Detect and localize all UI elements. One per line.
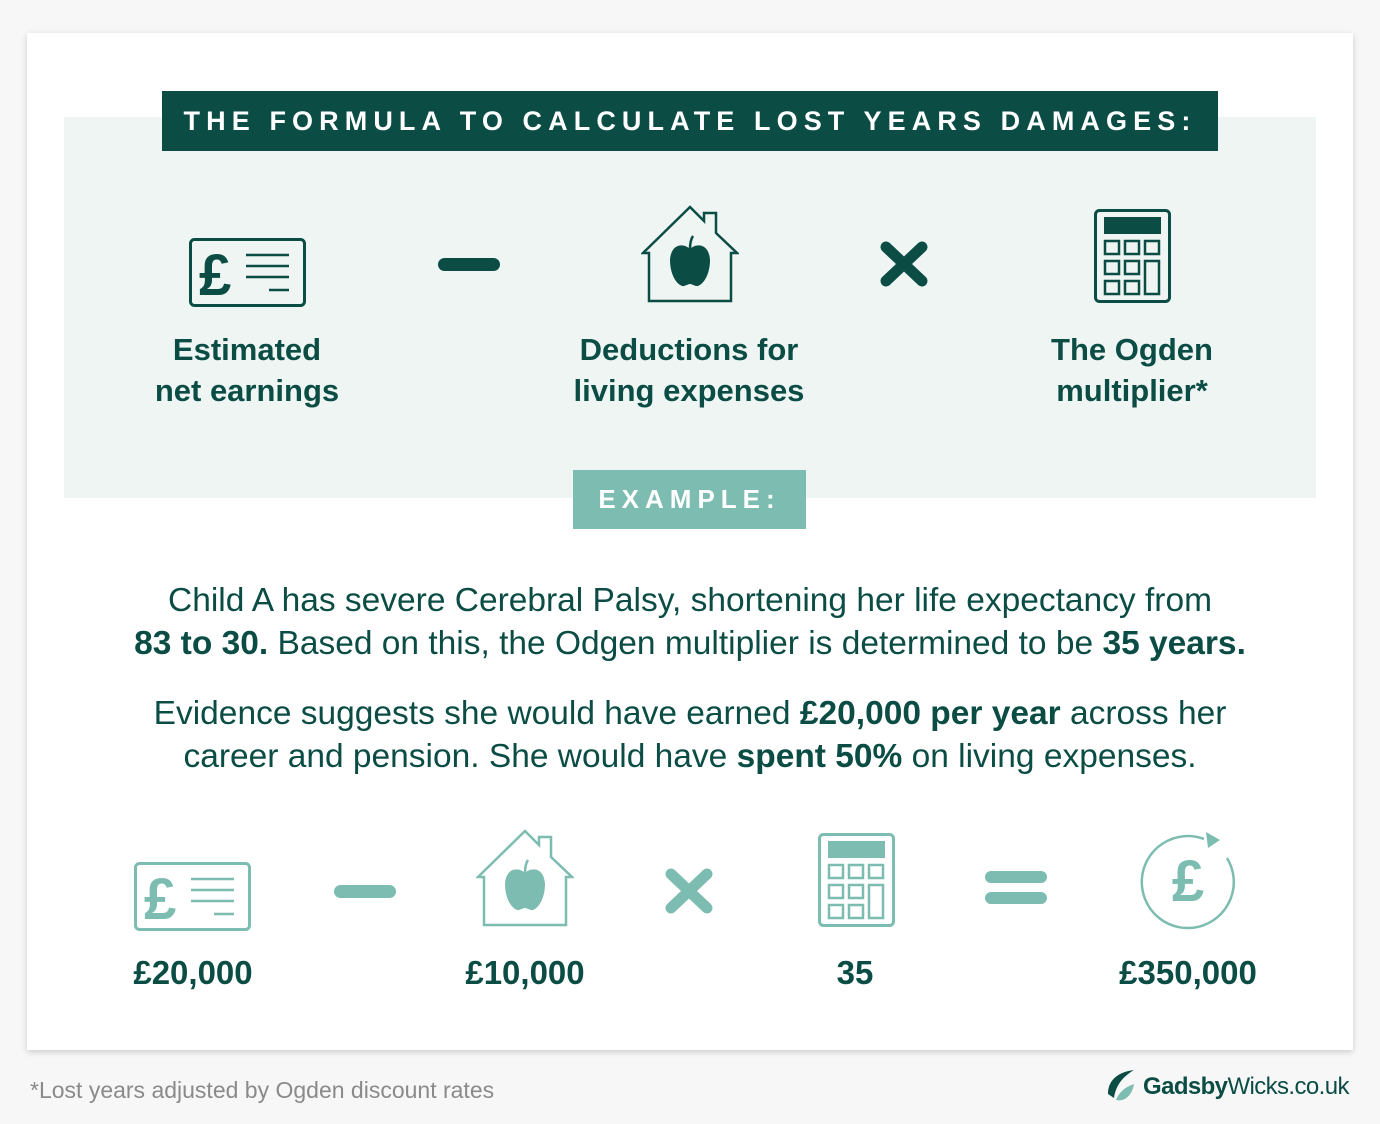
icon: house light — [476, 829, 574, 926]
text block: example paragraph 2 — [154, 695, 1226, 775]
example heading — [573, 470, 806, 529]
brand text: GadsbyWicks.co.uk — [1143, 1073, 1349, 1100]
value: 350000: £350,000 — [1119, 954, 1257, 991]
icon: house with apple — [641, 205, 739, 302]
label: estimated net earnings: Estimated — [173, 332, 321, 367]
icon: earnings card light — [134, 862, 251, 932]
icon: minus — [438, 258, 500, 271]
label: ogden multiplier: multiplier* — [1056, 373, 1208, 408]
label: estimated net earnings — [155, 332, 339, 408]
icon: earnings card — [189, 238, 306, 308]
label: ogden multiplier: The Ogden — [1051, 332, 1213, 367]
text block: example paragraph 1 — [134, 582, 1246, 662]
icon: equals — [985, 871, 1047, 904]
label: ogden multiplier — [1051, 332, 1213, 408]
panel: formula — [64, 117, 1316, 498]
icon: pound circle — [1140, 832, 1236, 930]
value: 35: 35 — [837, 954, 873, 991]
value: 10000: £10,000 — [465, 954, 585, 991]
label: deductions — [574, 332, 804, 408]
label: estimated net earnings: net earnings — [155, 373, 339, 408]
icon: pound circle: £ — [1172, 849, 1204, 914]
icon: earnings card: £ — [199, 243, 231, 308]
footnote: *Lost years adjusted by Ogden discount rates — [30, 1077, 494, 1103]
title: THE FORMULA TO CALCULATE LOST YEARS DAMAGES: — [184, 106, 1196, 136]
text block: example paragraph 1: 83 to 30. Based on this, the Odgen multiplier is determined to be 35 years. — [134, 625, 1246, 662]
text block: example paragraph 2: career and pension. She would have spent 50% on living expenses. — [183, 738, 1197, 775]
icon: earnings card light: £ — [144, 867, 176, 932]
icon: multiply light — [666, 868, 712, 914]
icon: multiply — [880, 242, 928, 286]
label: deductions: Deductions for — [580, 332, 798, 367]
value: 20000: £20,000 — [133, 954, 253, 991]
logo — [1108, 1070, 1350, 1100]
icon: minus light — [334, 885, 396, 898]
title — [162, 91, 1218, 151]
text block: example paragraph 2: Evidence suggests she would have earned £20,000 per year across her — [154, 695, 1226, 732]
example heading: EXAMPLE: — [598, 484, 781, 514]
label: deductions: living expenses — [574, 373, 804, 408]
icon: leaf — [1108, 1070, 1134, 1100]
icon: calculator light — [818, 833, 895, 927]
text block: example paragraph 1: Child A has severe Cerebral Palsy, shortening her life expectancy from — [168, 582, 1212, 619]
icon: calculator — [1094, 209, 1171, 303]
